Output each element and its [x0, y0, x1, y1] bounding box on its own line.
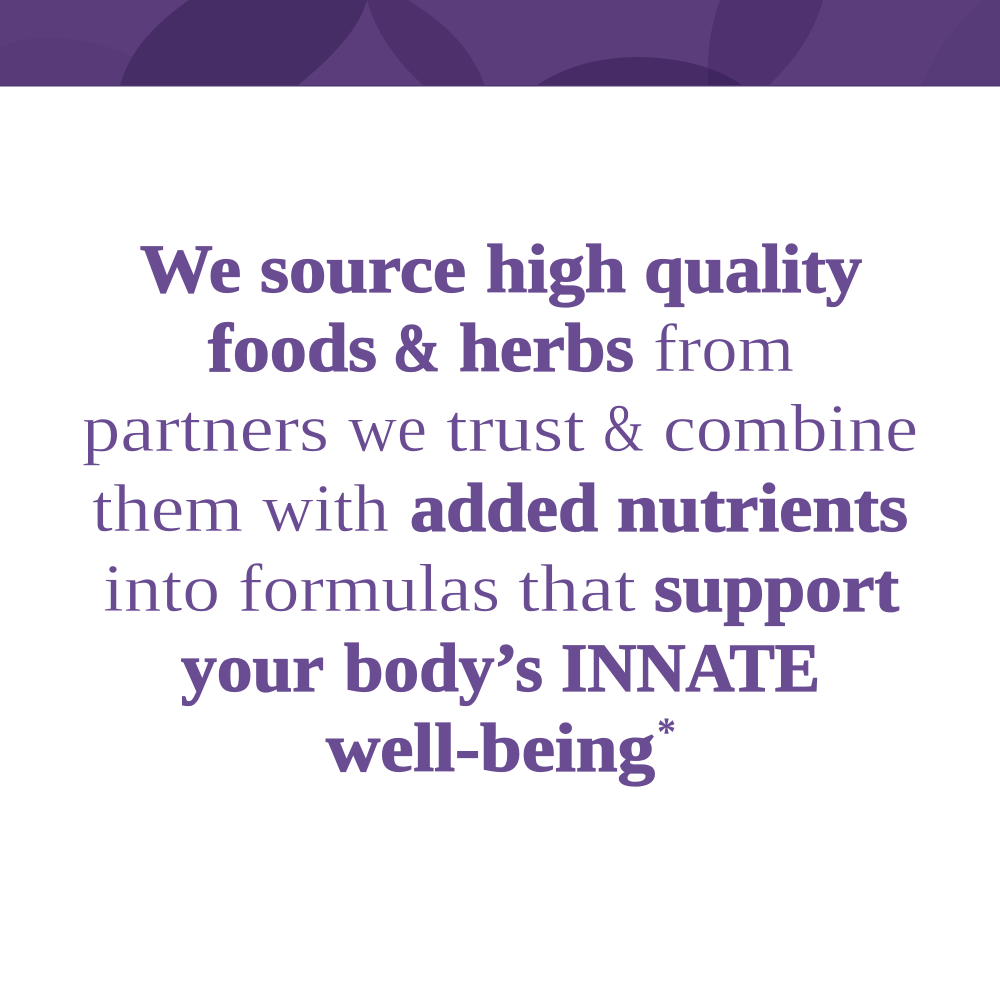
- line 2: &: [393, 310, 440, 386]
- line 3: trust: [446, 390, 585, 466]
- line 6: [181, 630, 820, 706]
- line 4: them: [92, 470, 243, 546]
- line 4: nutrients: [617, 470, 908, 546]
- line 1: quality: [644, 231, 862, 307]
- line 1: high: [486, 231, 626, 307]
- purple banner with overlapping shapes: [0, 0, 1000, 86]
- line 2: from: [653, 310, 794, 386]
- line 4: [92, 470, 908, 546]
- line 5: formulas: [238, 550, 500, 626]
- line 5: that: [518, 550, 636, 626]
- line 3: [82, 390, 918, 466]
- line 6: your: [181, 630, 324, 706]
- line 2: foods: [208, 310, 377, 386]
- line 6: INNATE: [561, 630, 820, 706]
- line 3: combine: [663, 390, 918, 466]
- line 5: into: [103, 550, 220, 626]
- line 1: source: [260, 231, 466, 307]
- line 3: &: [603, 390, 644, 466]
- line 2: herbs: [459, 310, 634, 386]
- line 2: [208, 310, 794, 386]
- line 7: well-being: [326, 710, 655, 786]
- line 3: partners: [82, 390, 329, 466]
- line 6: body’s: [344, 630, 543, 706]
- line 4: with: [262, 470, 389, 546]
- line 1: We: [140, 231, 241, 307]
- main statement text: [82, 231, 918, 786]
- line 3: we: [348, 390, 427, 466]
- line 5: [103, 550, 899, 626]
- line 7: *: [657, 709, 676, 754]
- line 4: added: [410, 470, 598, 546]
- line 5: support: [654, 550, 899, 626]
- line 1: [140, 231, 862, 307]
